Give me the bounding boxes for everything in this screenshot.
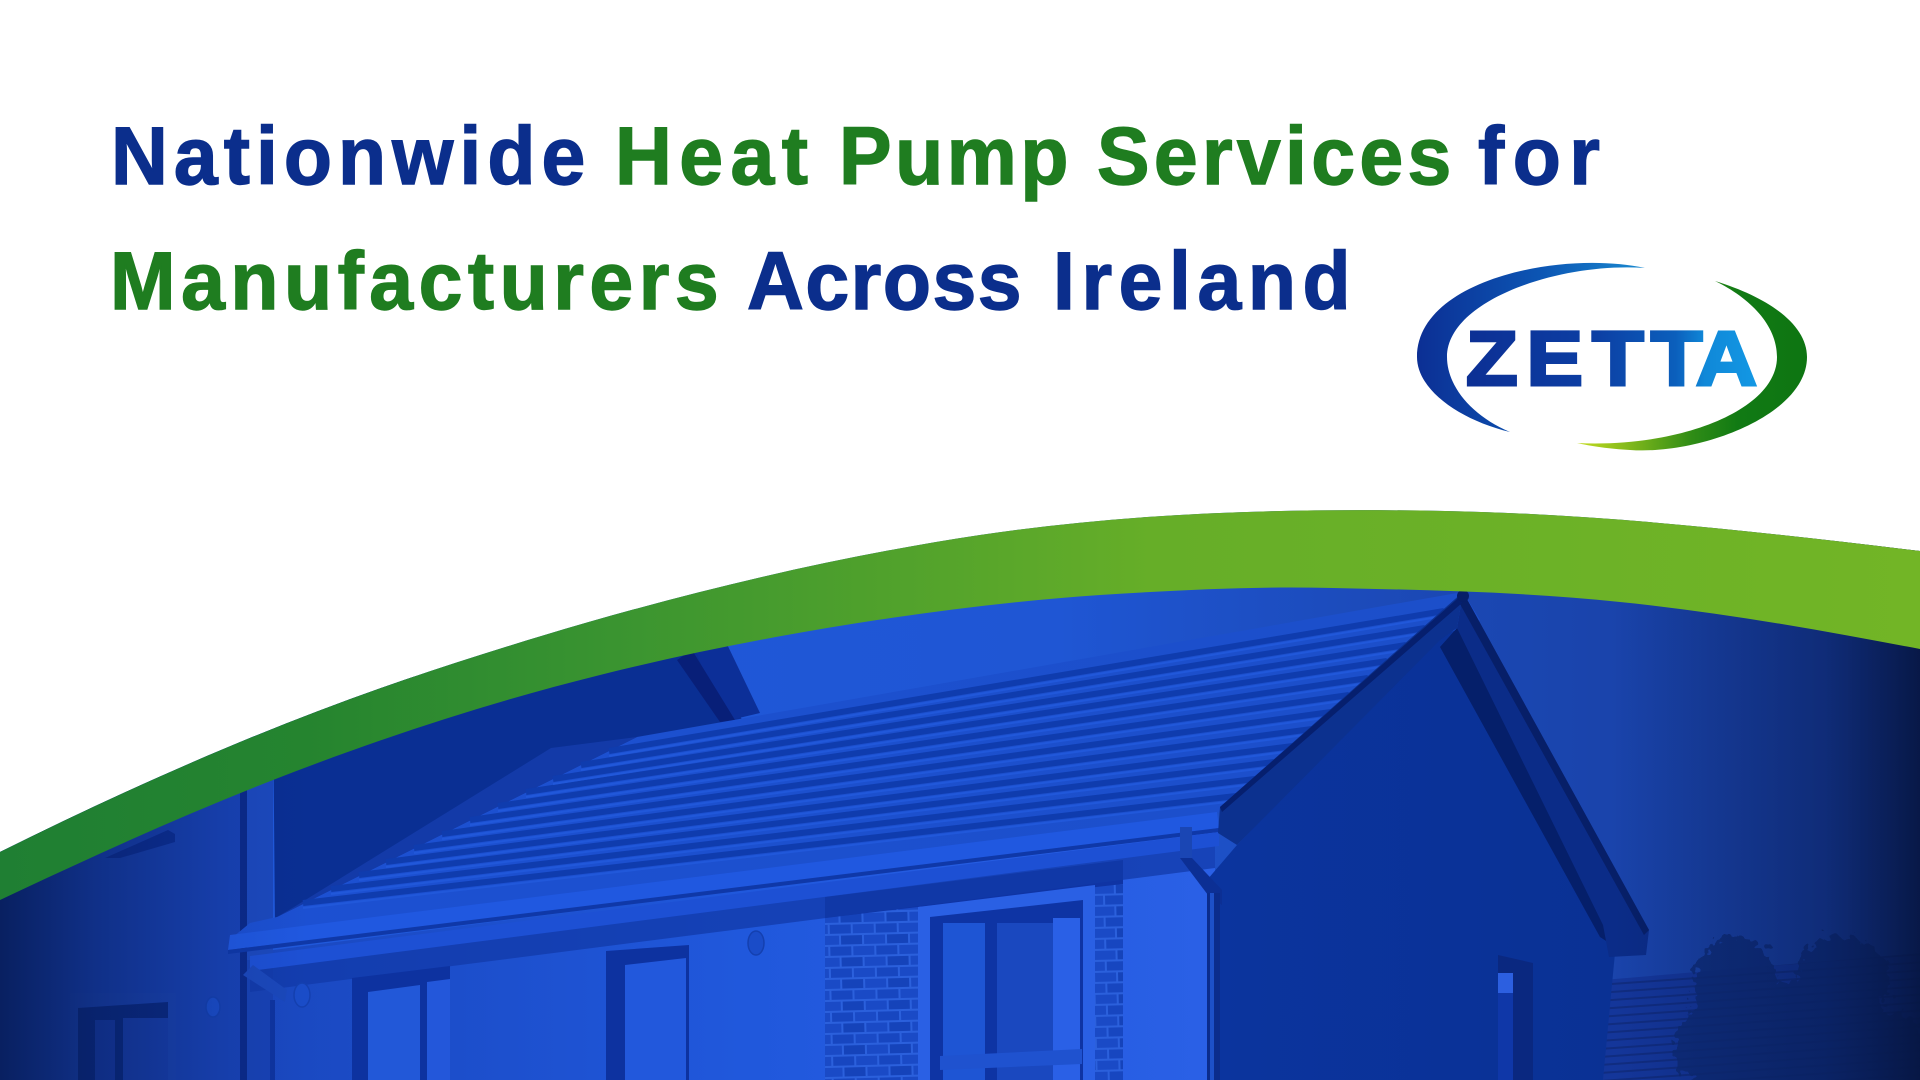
middle window xyxy=(606,945,689,1080)
side window xyxy=(1498,955,1533,1080)
gable bargeboards xyxy=(1218,590,1649,957)
title line 2: Across xyxy=(747,236,1022,327)
sky xyxy=(0,510,1920,980)
eaves shadow on wall xyxy=(250,842,1215,992)
house photo with blue tint xyxy=(0,500,1920,1080)
logo: ZETTA xyxy=(1417,263,1807,450)
left window xyxy=(352,966,450,1080)
roof tile courses xyxy=(303,611,1444,903)
neighbouring house gable xyxy=(273,630,760,925)
main roof xyxy=(233,592,1480,937)
wall vents xyxy=(206,931,764,1017)
title xyxy=(110,111,1600,327)
title line 2 xyxy=(110,236,1351,327)
left building wall xyxy=(0,700,273,1080)
brick lintel shadow xyxy=(825,860,1123,918)
downpipe left xyxy=(243,965,287,1080)
far roof behind house xyxy=(1603,964,1802,1080)
green curved band xyxy=(0,510,1920,900)
tree xyxy=(1672,929,1880,1080)
front wall xyxy=(273,830,1215,1080)
title line 1: Nationwide xyxy=(111,111,585,202)
hip shadow xyxy=(277,737,637,917)
title line 1: for xyxy=(1478,111,1600,202)
gable soffit xyxy=(1440,628,1606,941)
title line 1: Pump xyxy=(839,111,1068,202)
title line 1: Services xyxy=(1097,111,1451,202)
edge vignette xyxy=(1651,527,1920,1080)
downpipe right xyxy=(1180,827,1222,1080)
left building window xyxy=(78,1002,168,1080)
gutter and fascia xyxy=(228,812,1219,971)
logo blue crescent xyxy=(1417,263,1645,432)
title line 1 xyxy=(111,111,1600,202)
logo wordmark: ZETTA xyxy=(1466,317,1757,402)
central window xyxy=(918,885,1095,1080)
title line 1: Heat xyxy=(615,111,808,202)
logo green crescent xyxy=(1577,281,1807,450)
title line 2: Manufacturers xyxy=(110,236,719,327)
title line 2: Ireland xyxy=(1053,236,1351,327)
gable wall xyxy=(1207,628,1620,1080)
brick panel xyxy=(825,863,1123,1080)
